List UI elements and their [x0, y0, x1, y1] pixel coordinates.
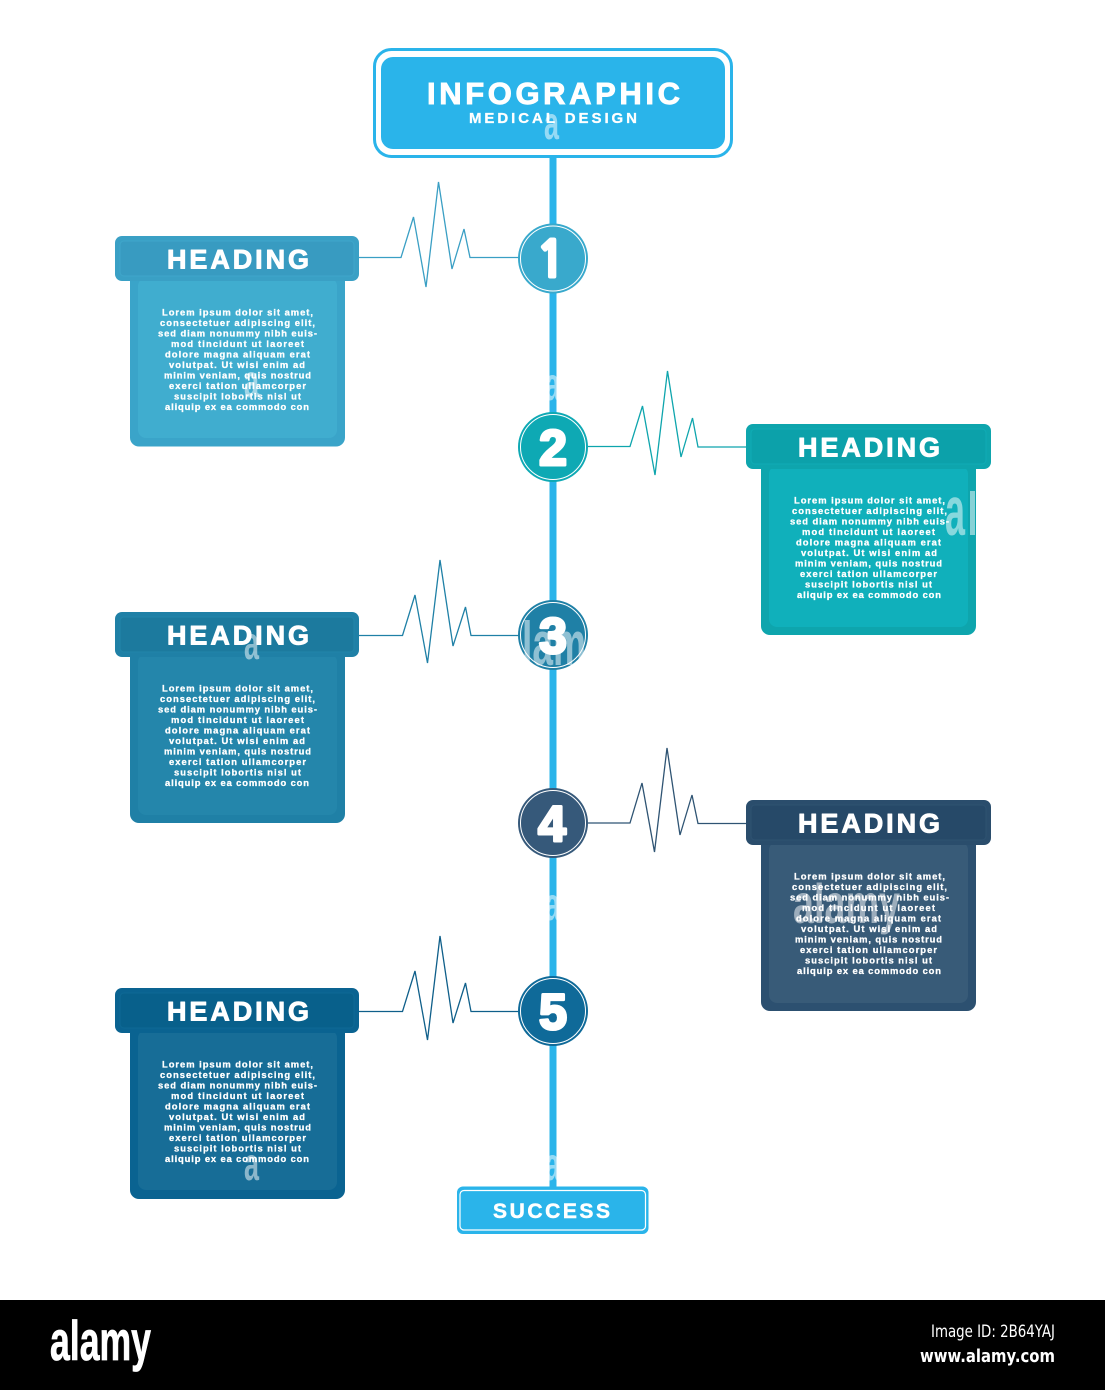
step 2 panel: a	[945, 472, 966, 550]
step 4 panel: aliquip ex ea commodo con	[797, 965, 941, 976]
step 3 panel: Lorem ipsum dolor sit amet,	[162, 682, 313, 694]
step 2 panel: sed diam nonummy nibh euis-	[790, 515, 949, 526]
watermark on timeline: a	[545, 1138, 560, 1190]
step 4 panel: volutpat. Ut wisi enim ad	[801, 923, 937, 934]
central timeline line	[550, 155, 556, 1188]
step 5 panel: dolore magna aliquam erat	[165, 1100, 310, 1111]
step 2 panel: dolore magna aliquam erat	[796, 536, 941, 547]
step 2 panel: exerci tation ullamcorper	[800, 568, 937, 579]
step 3 panel: aliquip ex ea commodo con	[165, 777, 309, 788]
step 3 panel: dolore magna aliquam erat	[165, 724, 310, 735]
watermark on timeline: a	[545, 358, 560, 410]
step 1 panel: a	[244, 355, 259, 407]
step 1 panel: volutpat. Ut wisi enim ad	[169, 359, 305, 370]
step 3 panel	[115, 612, 359, 823]
title box: a	[544, 97, 559, 149]
step 5 panel: mod tincidunt ut laoreet	[171, 1090, 304, 1101]
step 1 panel: suscipit lobortis nisl ut	[174, 390, 301, 401]
step 4 panel: Lorem ipsum dolor sit amet,	[794, 870, 945, 882]
step 4 number badge: 4	[538, 796, 566, 852]
step 4 panel: minim veniam, quis nostrud	[795, 933, 942, 944]
watermark on timeline: a	[545, 878, 560, 930]
website text: www.alamy.com	[920, 1346, 1055, 1367]
step 5 panel: a	[244, 1138, 259, 1190]
step 5 panel: Lorem ipsum dolor sit amet,	[162, 1058, 313, 1070]
success box: SUCCESS	[493, 1200, 610, 1223]
title box: INFOGRAPHIC	[427, 76, 680, 111]
step 3 panel: mod tincidunt ut laoreet	[171, 714, 304, 725]
step 1 number badge	[518, 224, 588, 294]
step 4 panel: suscipit lobortis nisl ut	[805, 954, 932, 965]
step 4 panel: consectetuer adipiscing elit,	[792, 881, 947, 892]
step 1 panel: Lorem ipsum dolor sit amet,	[162, 306, 313, 318]
success box	[457, 1186, 648, 1234]
step 5 panel: aliquip ex ea commodo con	[165, 1153, 309, 1164]
step 2 number badge: 2	[539, 420, 567, 476]
step 2 pulse line	[588, 371, 746, 475]
footer bar	[0, 1300, 1105, 1390]
step 3 panel: minim veniam, quis nostrud	[164, 745, 311, 756]
step 3 panel: HEADING	[167, 620, 309, 650]
image id text: Image ID: 2B64YAJ	[931, 1322, 1055, 1342]
alamy logo: alamy	[50, 1309, 151, 1372]
step 1 panel: aliquip ex ea commodo con	[165, 401, 309, 412]
step 5 number badge	[518, 976, 588, 1046]
step 4 panel: HEADING	[798, 808, 940, 838]
step 3 panel: a	[244, 617, 259, 669]
step 2 panel: consectetuer adipiscing elit,	[792, 505, 947, 516]
step 4 panel: exerci tation ullamcorper	[800, 944, 937, 955]
title box: MEDICAL DESIGN	[469, 110, 637, 127]
step 5 panel	[115, 988, 359, 1199]
step 2 panel: aliquip ex ea commodo con	[797, 589, 941, 600]
step 2 panel: suscipit lobortis nisl ut	[805, 578, 932, 589]
step 1 panel: sed diam nonummy nibh euis-	[158, 327, 317, 338]
step 1 panel: minim veniam, quis nostrud	[164, 369, 311, 380]
step 5 panel: consectetuer adipiscing elit,	[160, 1069, 315, 1080]
step 1 panel	[115, 236, 359, 446]
step 1 pulse line	[359, 182, 519, 287]
step 5 panel: HEADING	[167, 996, 309, 1026]
step 2 number badge	[518, 412, 588, 482]
step 3 number badge	[518, 600, 588, 679]
step 2 panel: volutpat. Ut wisi enim ad	[801, 547, 937, 558]
step 1 panel: mod tincidunt ut laoreet	[171, 338, 304, 349]
step 5 panel: exerci tation ullamcorper	[169, 1132, 306, 1143]
step 1 panel: dolore magna aliquam erat	[165, 348, 310, 359]
step 3 panel: suscipit lobortis nisl ut	[174, 766, 301, 777]
step 2 panel: Lorem ipsum dolor sit amet,	[794, 494, 945, 506]
step 5 pulse line	[359, 936, 519, 1040]
step 3 panel: exerci tation ullamcorper	[169, 756, 306, 767]
step 3 number badge: lam	[522, 610, 586, 679]
step 1 panel: exerci tation ullamcorper	[169, 380, 306, 391]
step 3 panel: consectetuer adipiscing elit,	[160, 693, 315, 704]
step 2 panel: minim veniam, quis nostrud	[795, 557, 942, 568]
step 4 panel: dolore magna aliquam erat	[796, 912, 941, 923]
step 1 number badge: 1	[536, 236, 566, 285]
step 4 pulse line	[588, 748, 746, 852]
step 5 panel: suscipit lobortis nisl ut	[174, 1142, 301, 1153]
step 5 number badge: 5	[539, 984, 567, 1040]
step 4 panel	[746, 800, 991, 1011]
step 4 number badge	[518, 788, 588, 858]
step 2 panel: mod tincidunt ut laoreet	[802, 526, 935, 537]
step 2 panel	[746, 424, 991, 635]
step 3 number badge: 3	[539, 608, 567, 664]
step 5 panel: volutpat. Ut wisi enim ad	[169, 1111, 305, 1122]
step 1 panel: HEADING	[167, 244, 309, 274]
step 3 pulse line	[359, 560, 519, 663]
step 5 panel: minim veniam, quis nostrud	[164, 1121, 311, 1132]
step 5 panel: sed diam nonummy nibh euis-	[158, 1079, 317, 1090]
title box	[374, 50, 732, 156]
step 2 panel: HEADING	[798, 432, 940, 462]
step 4 panel: mod tincidunt ut laoreet	[802, 902, 935, 913]
step 4 panel: sed diam nonummy nibh euis-	[790, 891, 949, 902]
step 4 panel: alamy	[793, 872, 900, 935]
watermark on timeline	[545, 358, 560, 1190]
step 3 panel: volutpat. Ut wisi enim ad	[169, 735, 305, 746]
step 1 panel: consectetuer adipiscing elit,	[160, 317, 315, 328]
step 3 panel: sed diam nonummy nibh euis-	[158, 703, 317, 714]
